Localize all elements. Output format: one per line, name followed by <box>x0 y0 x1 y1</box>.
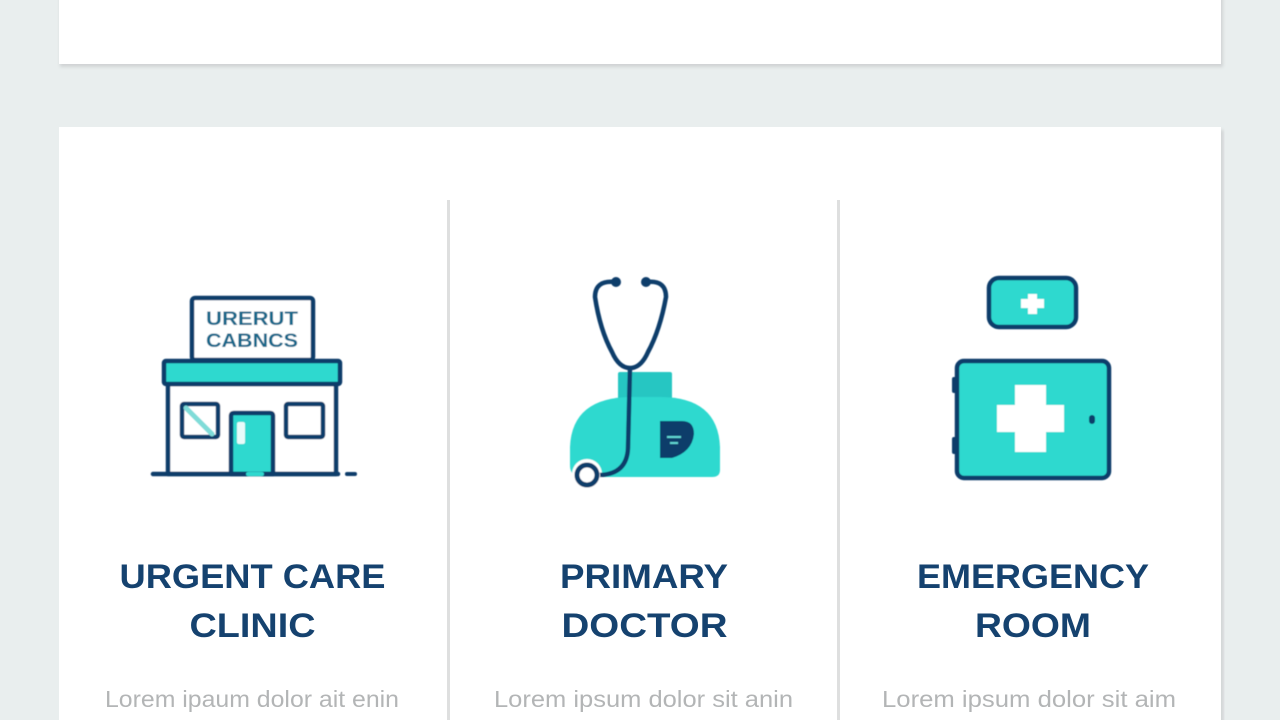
clinic sign text: URERUT <box>206 309 298 330</box>
heading: emergency room <box>917 558 1149 645</box>
icon: urgent care clinic building <box>153 298 355 474</box>
panel: top card <box>59 0 1223 67</box>
icon: stethoscope and doctor coat <box>570 277 720 489</box>
icon: emergency first aid kit <box>952 278 1109 478</box>
text: primary doctor description: Lorem ipsum dolor sit anin <box>494 686 793 712</box>
text: emergency room description: Lorem ipsum dolor sit aim <box>882 686 1176 712</box>
panel: care options card <box>59 127 1224 720</box>
heading: primary doctor: PRIMARY <box>560 558 728 596</box>
clinic sign text: CABNCS <box>206 331 298 352</box>
heading: primary doctor: DOCTOR <box>562 607 728 645</box>
text: urgent care description: Lorem ipaum dolor ait enin <box>105 686 399 712</box>
clinic sign text <box>206 309 298 352</box>
heading: primary doctor <box>560 558 728 645</box>
heading: urgent care clinic <box>120 558 386 645</box>
heading: urgent care clinic: CLINIC <box>190 607 316 645</box>
heading: emergency room: EMERGENCY <box>917 558 1149 596</box>
heading: emergency room: ROOM <box>975 607 1091 645</box>
heading: urgent care clinic: URGENT CARE <box>120 558 386 596</box>
